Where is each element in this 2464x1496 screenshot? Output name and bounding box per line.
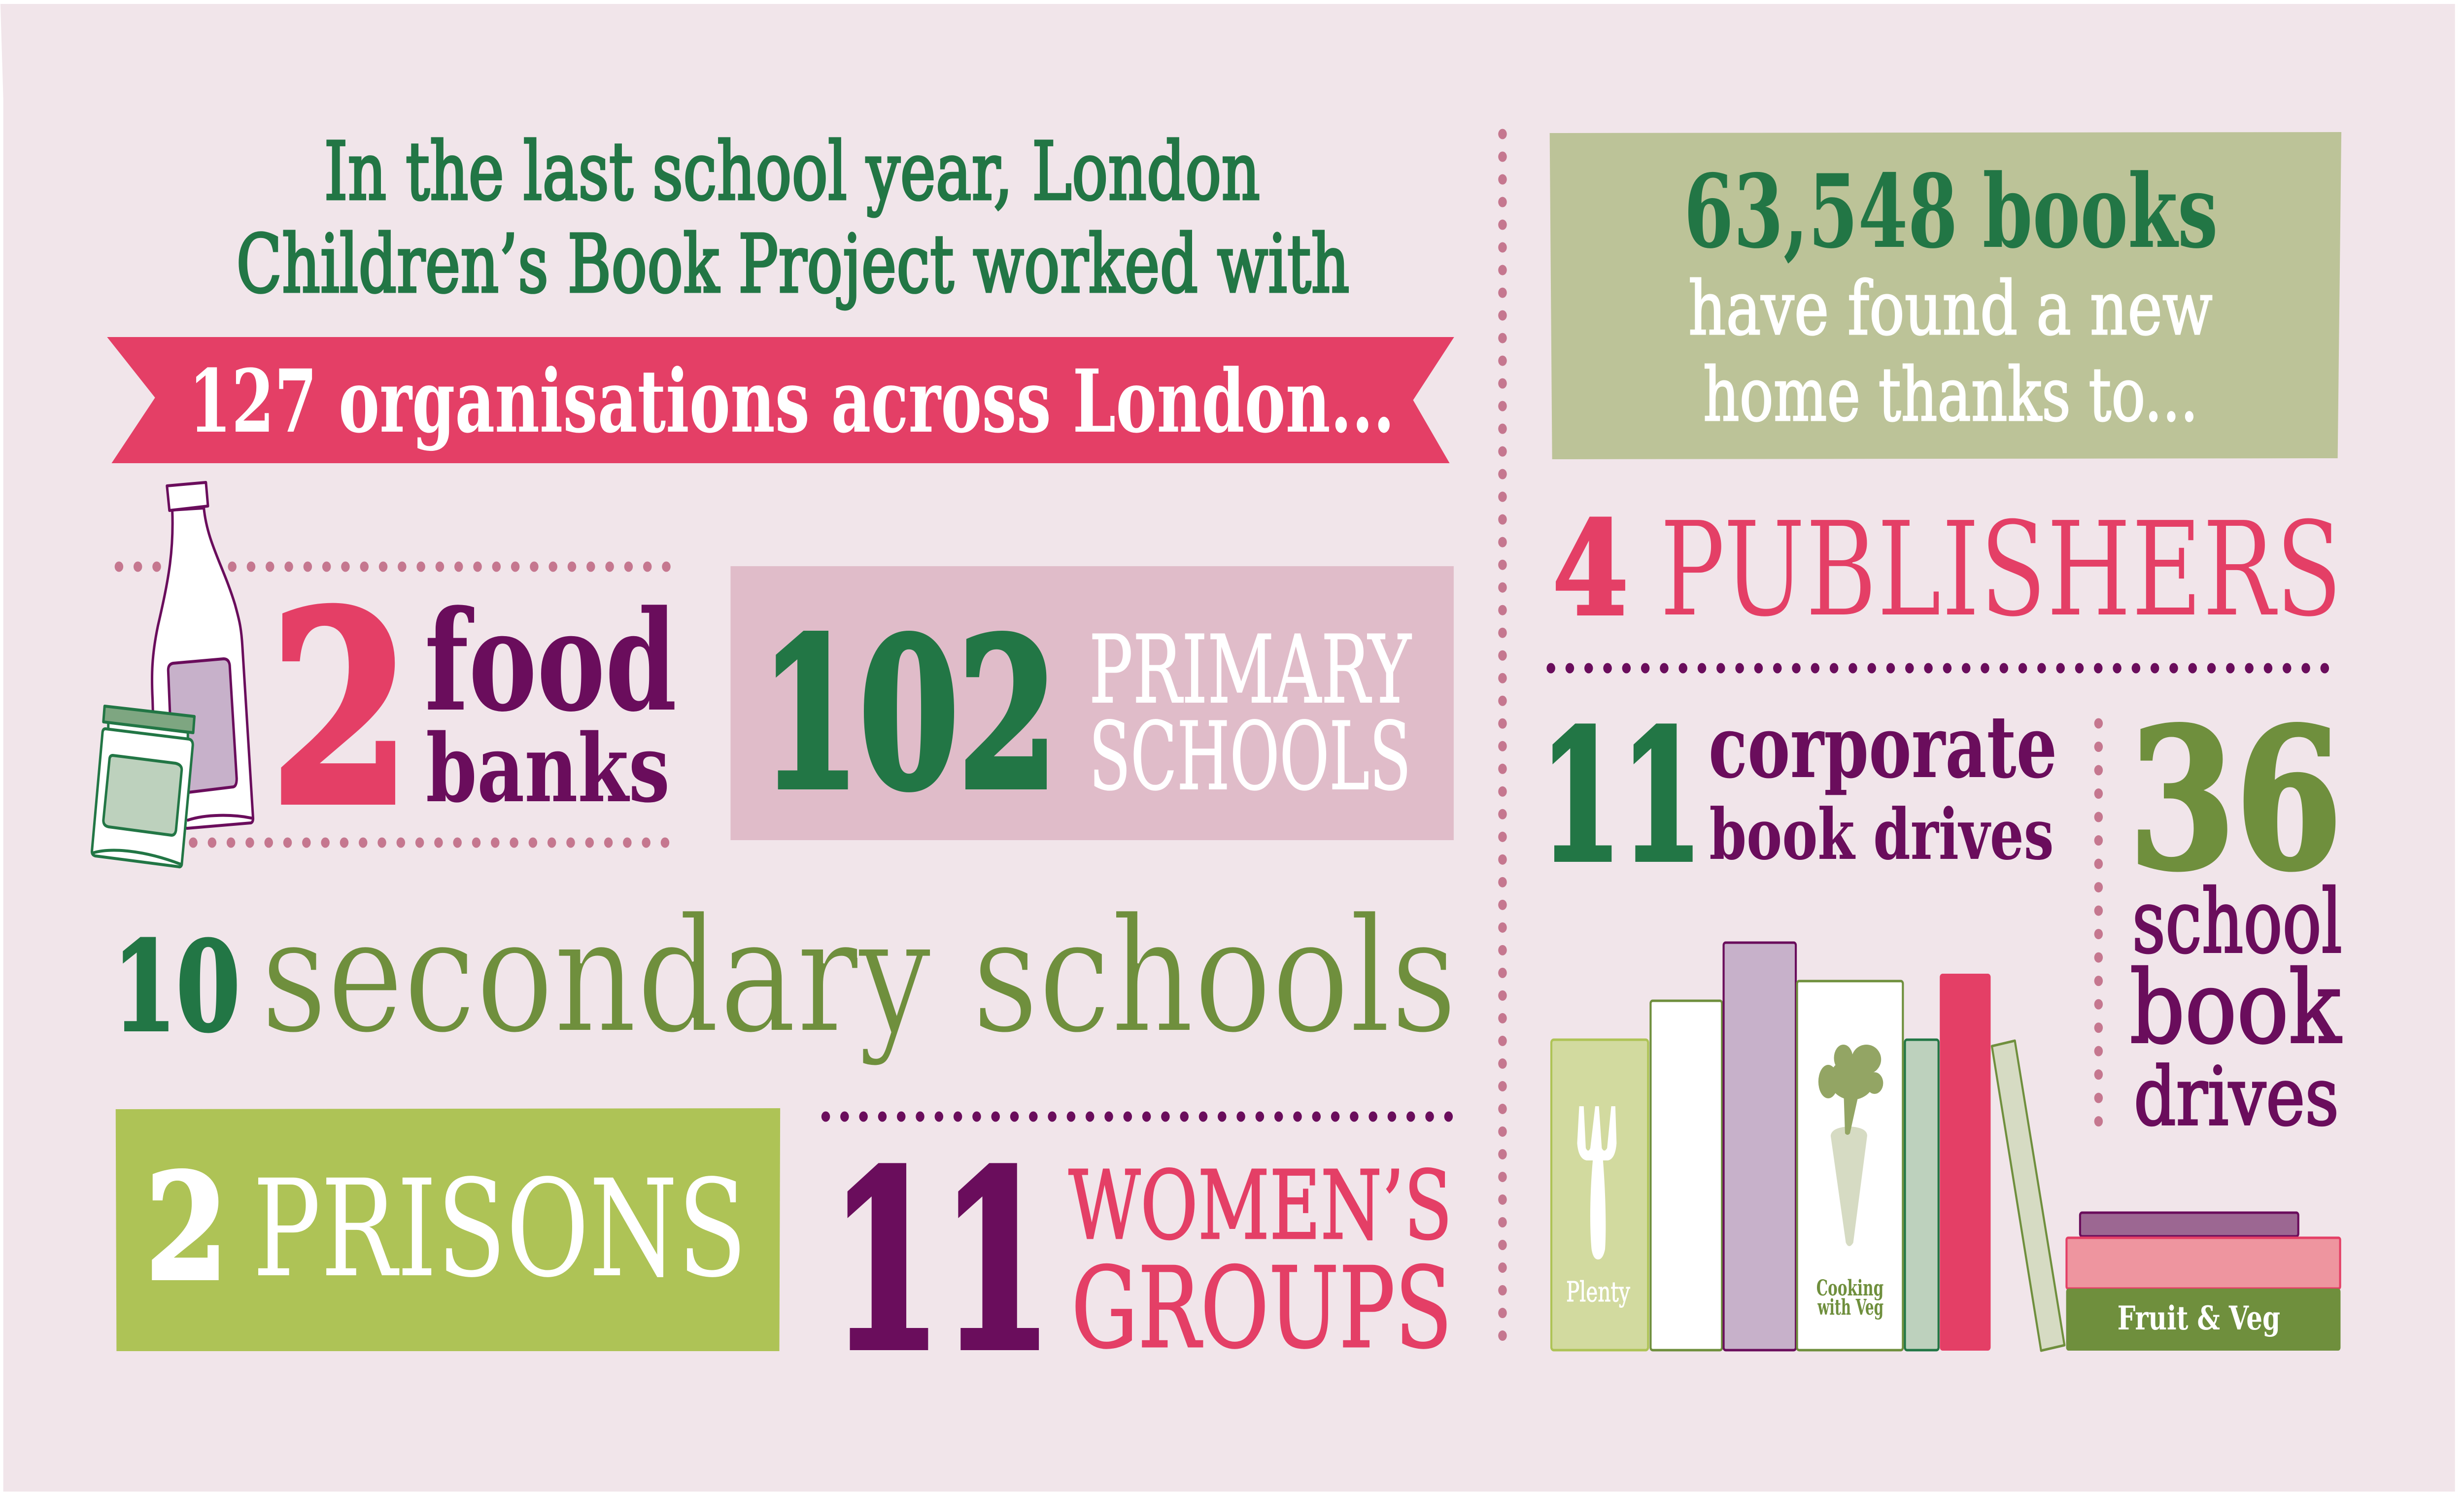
number: 11 corporate book drives: 11 <box>1540 691 1702 901</box>
book: white <box>1650 1001 1722 1350</box>
panel: prisons: PRISONS <box>253 1152 747 1307</box>
book: Plenty: Plenty <box>1566 1276 1630 1308</box>
book: Plenty <box>1551 1040 1648 1350</box>
label: banks: banks <box>426 714 670 824</box>
banner: 127 organisations <box>107 337 1454 463</box>
number: 4 publishers: 4 <box>1552 493 1628 645</box>
panel: primary schools: 102 <box>761 595 1057 835</box>
icon: jar <box>92 706 195 867</box>
icon: bottle <box>152 482 253 828</box>
book: Cooking with Veg: with Veg <box>1817 1294 1883 1320</box>
divider dots: vertical right <box>2093 723 2104 1125</box>
number: 36: 36 <box>2129 686 2342 913</box>
book: leaning <box>1992 1041 2064 1351</box>
panel: 63,548 books: have found a new <box>1688 266 2213 352</box>
label: groups: GROUPS <box>1071 1244 1452 1373</box>
panel: 63,548 books: 63,548 books <box>1684 153 2218 271</box>
panel: primary schools: PRIMARY <box>1089 616 1412 725</box>
title <box>236 126 1349 311</box>
label: book drives: book drives <box>1709 793 2054 876</box>
illustration: books <box>1551 943 2340 1351</box>
book: Cooking with Veg: Cooking <box>1816 1275 1883 1301</box>
divider dots: food banks top <box>119 562 669 572</box>
book: Cooking with Veg <box>1797 981 1903 1350</box>
book: Fruit & Veg: Fruit & Veg <box>2118 1299 2280 1337</box>
divider dots: women's groups <box>826 1112 1452 1122</box>
divider dots: food banks bottom <box>193 838 669 848</box>
panel: primary schools: SCHOOLS <box>1089 703 1411 812</box>
label: school book drives <box>2130 871 2342 1144</box>
label: school book drives: drives <box>2134 1051 2339 1144</box>
label: food: food <box>424 580 677 742</box>
book: sage green <box>1905 1040 1939 1350</box>
label: school book drives: school <box>2132 871 2342 973</box>
title: Children’s Book Project worked with <box>236 218 1349 311</box>
divider dots: under publishers <box>1551 663 2340 673</box>
panel: prisons <box>116 1108 780 1351</box>
panel: 63,548 books <box>1550 132 2341 459</box>
label: secondary schools: secondary schools <box>261 884 1457 1068</box>
book: Fruit & Veg <box>2066 1289 2340 1351</box>
number: 11 women's groups: 11 <box>831 1120 1052 1403</box>
book: stack top <box>2080 1213 2298 1236</box>
icon: carrot <box>1818 1045 1883 1246</box>
book: lilac <box>1724 943 1796 1350</box>
label: corporate: corporate <box>1709 696 2057 797</box>
book: red <box>1940 974 1990 1351</box>
panel: primary schools <box>730 566 1454 840</box>
label: publishers: PUBLISHERS <box>1660 493 2342 646</box>
title: In the last school year, London <box>324 126 1260 218</box>
number: 2 food banks: 2 <box>271 555 410 862</box>
label: women's: WOMEN’S <box>1068 1151 1452 1261</box>
panel: 63,548 books: home thanks to... <box>1703 352 2198 438</box>
number: 10: 10 <box>113 915 240 1059</box>
divider dots: centre vertical <box>1497 134 1507 1353</box>
label: school book drives: book <box>2130 950 2342 1066</box>
banner: 127 organisations: 127 organisations across London... <box>189 351 1395 452</box>
panel: prisons: 2 <box>145 1142 228 1313</box>
book: stack middle <box>2066 1238 2340 1289</box>
